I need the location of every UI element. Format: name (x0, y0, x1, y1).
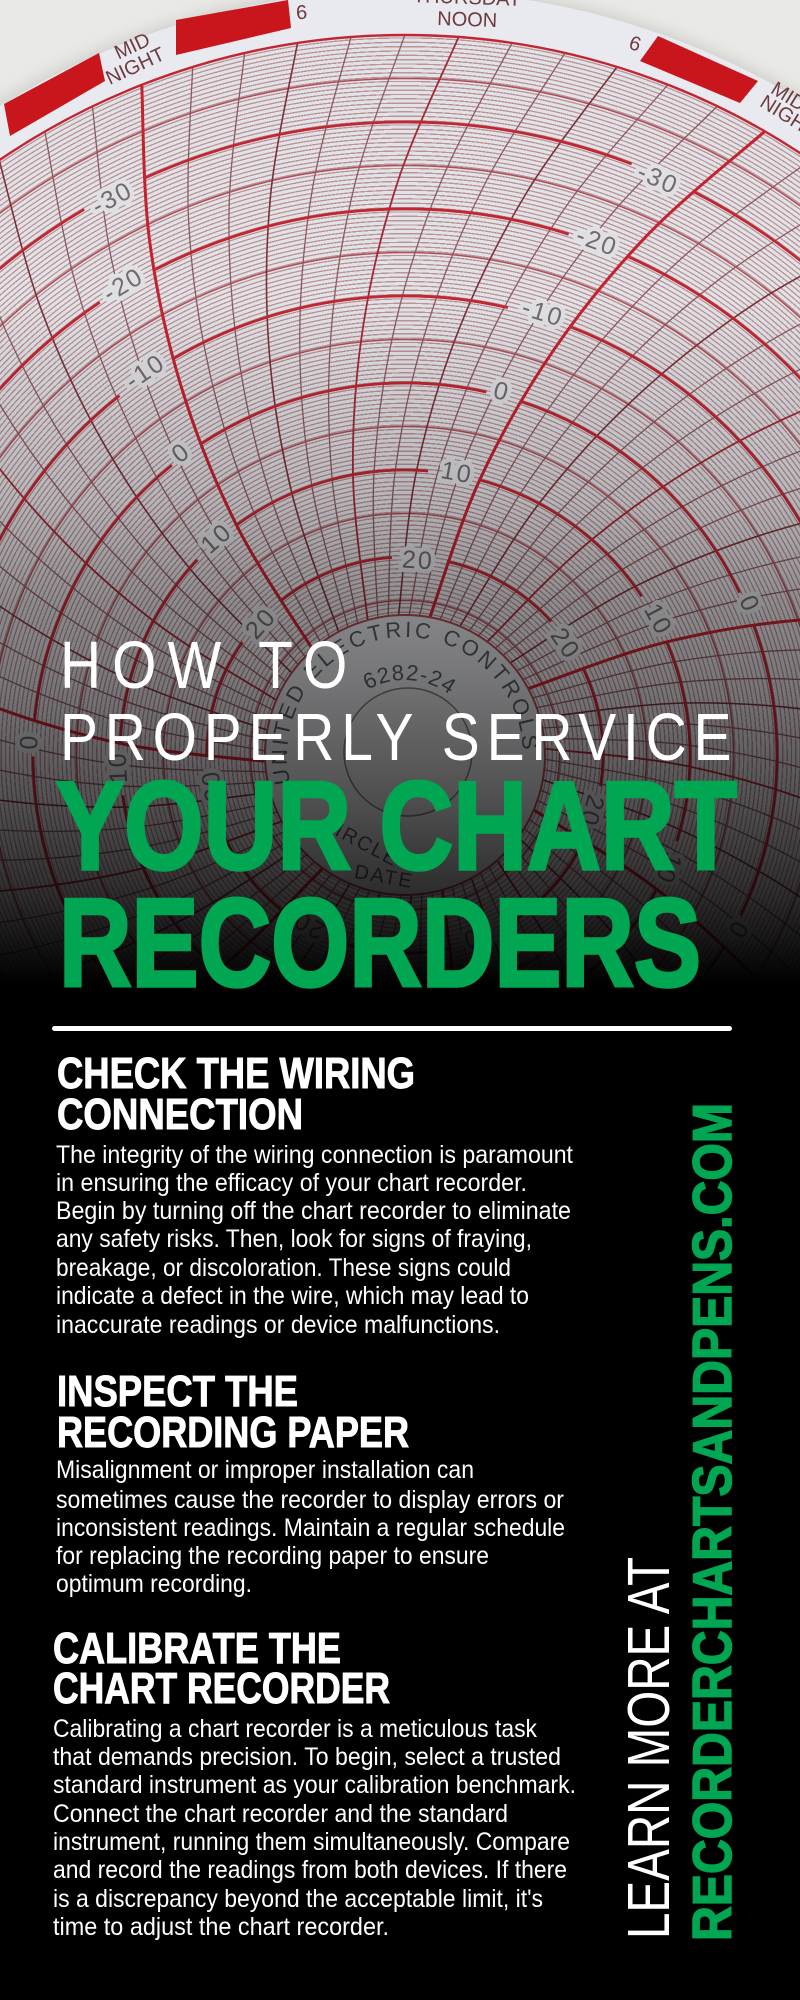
heading: CALIBRATE THE (53, 1624, 341, 1673)
body text: sometimes cause the recorder to display errors or (56, 1486, 564, 1514)
temperature scale labels: -30 (633, 158, 683, 200)
temperature scale labels: 10 (195, 517, 238, 559)
body text: Calibrating a chart recorder is a meticulous task (53, 1715, 537, 1743)
title (56, 629, 737, 1013)
body text: breakage, or discoloration. These signs could (56, 1254, 511, 1282)
body text: for replacing the recording paper to ensure (56, 1542, 489, 1570)
heading: CHART RECORDER (53, 1664, 390, 1713)
body text: optimum recording. (56, 1570, 252, 1598)
divider rule (52, 1026, 732, 1031)
temperature scale labels: 20 (288, 905, 330, 945)
body text: inaccurate readings or device malfunctions. (56, 1311, 500, 1339)
body text: any safety risks. Then, look for signs of fraying, (56, 1225, 532, 1253)
chart centre hub: UNITED ELECTRIC CONTROLS (272, 622, 536, 784)
title: HOW TO (60, 629, 347, 703)
temperature scale labels: 20 (545, 623, 586, 665)
chart centre hub: 6282-240 (364, 664, 456, 693)
chart centre hub (264, 614, 546, 896)
heading (53, 1624, 390, 1713)
section: calibrate the chart recorder (53, 1624, 576, 1941)
body text: is a discrepancy beyond the acceptable limit, it's (53, 1885, 543, 1913)
temperature scale labels: -30 (87, 176, 137, 220)
temperature scale labels: 0 (166, 437, 196, 469)
heading: CHECK THE WIRING (57, 1049, 415, 1098)
temperature scale labels: 0 (733, 591, 765, 617)
vertical call to action: RECORDERCHARTSANDPENS.COM (681, 1103, 743, 1941)
chart centre hub: CIRCLE (317, 812, 403, 871)
body text: The integrity of the wiring connection is paramount (56, 1141, 573, 1169)
body text (56, 1141, 573, 1339)
body text: instrument, running them simultaneously. Compare (53, 1828, 570, 1856)
temperature scale labels: 10 (104, 751, 133, 784)
heading (57, 1367, 409, 1457)
title: PROPERLY SERVICE (60, 701, 732, 775)
body text: in ensuring the efficacy of your chart recorder. (56, 1169, 527, 1197)
rim labels: MID (111, 29, 154, 64)
vertical call to action (616, 1103, 743, 1941)
temperature scale labels: 10 (215, 966, 257, 1008)
temperature scale labels: -10 (518, 293, 567, 333)
body text: Begin by turning off the chart recorder to eliminate (56, 1197, 571, 1225)
body text: and record the readings from both devices. If there (53, 1856, 567, 1884)
body text: standard instrument as your calibration benchmark. (53, 1771, 576, 1799)
heading: CONNECTION (57, 1090, 303, 1139)
heading: INSPECT THE (57, 1367, 298, 1416)
temperature scale labels: 10 (439, 456, 475, 489)
temperature scale labels: 0 (722, 917, 754, 944)
body text: indicate a defect in the wire, which may lead to (56, 1282, 529, 1310)
temperature scale labels: 10 (462, 1014, 500, 1050)
body text (53, 1715, 576, 1941)
red day blocks on chart rim (4, 0, 758, 136)
rim labels: 6 (295, 2, 308, 24)
vertical call to action: LEARN MORE AT (616, 1557, 682, 1939)
temperature scale labels: 20 (240, 602, 282, 645)
temperature scale labels: 10 (650, 848, 688, 888)
temperature scale labels: 20 (458, 917, 498, 955)
temperature scale labels: 20 (196, 768, 229, 804)
rim labels: NIGHT (103, 43, 168, 90)
body text: time to adjust the chart recorder. (53, 1913, 389, 1941)
temperature scale labels: -20 (98, 262, 149, 308)
temperature scale labels: 10 (638, 599, 678, 640)
temperature scale labels: -10 (120, 348, 171, 395)
temperature scale labels (0, 158, 800, 1050)
body text: that demands precision. To begin, select a trusted (53, 1743, 561, 1771)
section: check the wiring connection (56, 1049, 573, 1339)
body text: Connect the chart recorder and the standard (53, 1800, 508, 1828)
temperature scale labels: 0 (490, 376, 513, 407)
rim labels: 6 (626, 32, 644, 56)
heading: RECORDING PAPER (57, 1408, 409, 1457)
heading (57, 1049, 415, 1139)
black lower panel (0, 1000, 800, 2000)
section: inspect the recording paper (56, 1367, 565, 1598)
temperature scale labels: 20 (574, 792, 610, 830)
rim labels: NOON (437, 8, 498, 32)
rim labels (103, 0, 800, 143)
temperature scale labels: -20 (572, 221, 622, 262)
chart centre hub: DATE (353, 861, 415, 893)
temperature scale labels: 0 (15, 733, 44, 750)
body text: inconsistent readings. Maintain a regular schedule (56, 1514, 565, 1542)
temperature scale labels: 20 (401, 545, 435, 575)
dark fade over photo (0, 0, 800, 1000)
body text (56, 1456, 565, 1598)
body text: Misalignment or improper installation can (56, 1456, 474, 1484)
